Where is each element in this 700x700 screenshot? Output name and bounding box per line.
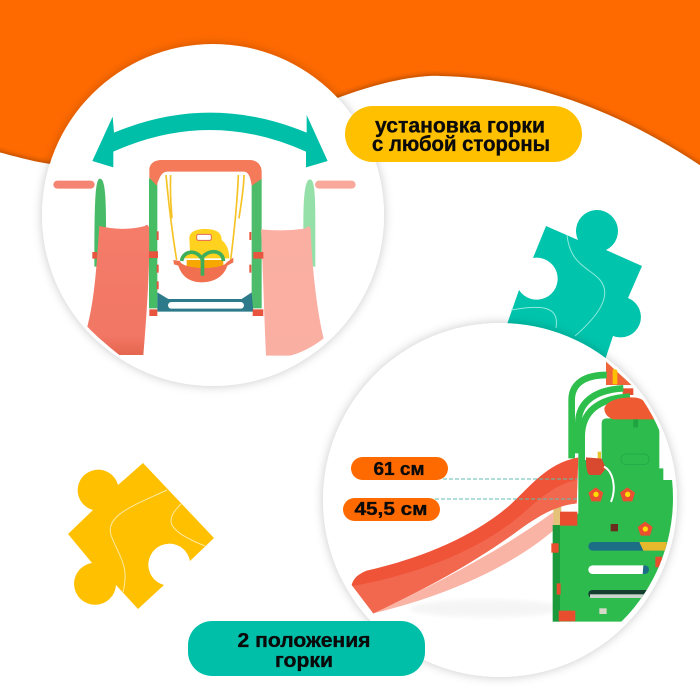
swing frame posts	[149, 178, 157, 308]
puzzle piece: yellow	[68, 463, 214, 609]
slots	[588, 542, 668, 551]
label on panel	[621, 454, 649, 465]
illustration: swing set	[53, 113, 356, 356]
right slide	[261, 226, 324, 356]
label: 45.5 cm: 45,5 см	[354, 499, 428, 519]
movement arrow	[604, 467, 614, 502]
ropes	[166, 175, 244, 260]
callout: two positions: горки	[275, 649, 333, 672]
illustration: slide with tower	[352, 362, 674, 622]
label: 45.5 cm	[343, 498, 440, 521]
circle panel: slide height	[323, 323, 677, 677]
orange frame behind arches	[606, 362, 632, 385]
tower back arches	[572, 375, 630, 470]
swing top bar	[149, 160, 262, 186]
label: 61 cm	[351, 457, 448, 480]
callout: two positions	[188, 621, 425, 676]
callout: side install: установка горки	[375, 114, 545, 138]
left slide	[87, 225, 149, 355]
under slide shade	[373, 512, 554, 613]
swing base	[157, 292, 253, 312]
swing seat	[173, 229, 233, 282]
slide	[352, 457, 578, 613]
tower main panel	[560, 418, 674, 622]
left slide tower	[94, 179, 106, 267]
floor shadow	[416, 602, 552, 615]
bolts	[588, 487, 653, 536]
arrow: double headed teal	[92, 113, 328, 167]
callout: two positions: 2 положения	[238, 629, 370, 652]
dashed measurement lines	[435, 479, 577, 499]
callout: side install	[345, 106, 582, 162]
label: 61 cm: 61 см	[374, 459, 424, 479]
puzzle piece: teal	[505, 210, 642, 360]
orange background	[0, 0, 700, 175]
handle hole	[586, 457, 606, 475]
callout: side install: с любой стороны	[372, 133, 550, 156]
ghost slide tower right	[303, 179, 315, 267]
circle panel: swing set with two slide positions	[42, 44, 384, 386]
bolts	[92, 231, 263, 316]
basket	[604, 397, 654, 419]
